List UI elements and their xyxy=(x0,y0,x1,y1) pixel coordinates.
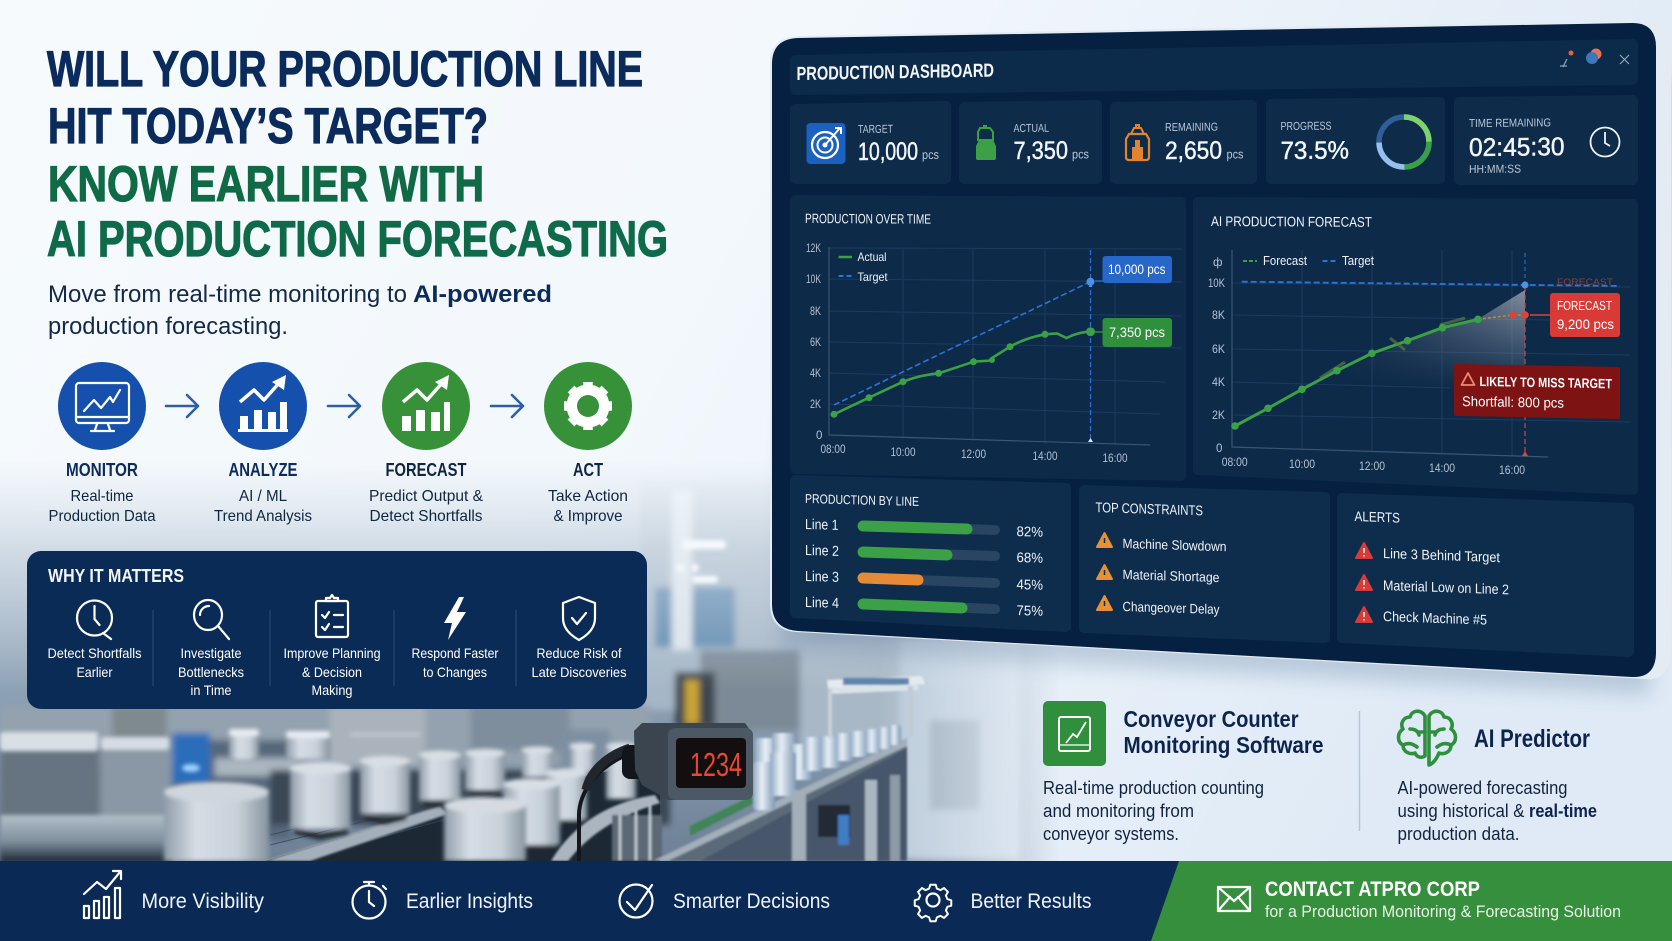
y axis labels xyxy=(806,243,822,442)
item: material shortage xyxy=(1097,565,1220,585)
y axis labels: 8K xyxy=(810,306,821,318)
panel: production by line: PRODUCTION BY LINE xyxy=(805,491,919,509)
step: forecast xyxy=(369,362,483,525)
stat card: time remaining xyxy=(1459,100,1633,180)
footer item: earlier insights xyxy=(352,882,533,918)
stat card: actual: pcs xyxy=(1072,147,1089,161)
x axis labels: 12:00 xyxy=(961,449,986,461)
factory photo background xyxy=(0,480,1048,861)
stat card: time remaining: TIME REMAINING xyxy=(1469,117,1551,130)
step: forecast: FORECAST xyxy=(386,459,467,480)
item: detect shortfalls: Detect Shortfalls xyxy=(48,645,142,661)
title xyxy=(47,41,668,267)
x axis labels: 08:00 xyxy=(820,444,846,456)
icon: brain xyxy=(1398,711,1456,765)
step: analyze: ANALYZE xyxy=(228,459,298,480)
subtitle: AI-powered xyxy=(413,281,552,308)
product: conveyor counter software xyxy=(1043,701,1324,844)
panel: alerts: ALERTS xyxy=(1354,508,1400,526)
footer item: more visibility: More Visibility xyxy=(142,890,264,913)
step: act xyxy=(544,362,632,525)
legend: Actual xyxy=(858,250,886,264)
arrow xyxy=(166,395,198,417)
counter sensor device: 1234 xyxy=(690,746,742,783)
item: detect shortfalls: Earlier xyxy=(76,664,113,680)
product: ai predictor: AI Predictor xyxy=(1474,725,1590,753)
chart panel: ai production forecast: FORECAST xyxy=(1557,277,1614,287)
item: improve planning xyxy=(284,595,380,698)
contact panel: CONTACT ATPRO CORP xyxy=(1265,877,1480,901)
right-hand conveyor xyxy=(655,741,907,861)
subtitle: Move from real-time monitoring to xyxy=(48,281,407,308)
stat card: remaining: pcs xyxy=(1226,147,1244,161)
title: AI PRODUCTION FORECASTING xyxy=(47,211,668,267)
stat card: remaining xyxy=(1115,105,1252,179)
forecast line xyxy=(1231,282,1529,430)
stat card: remaining: 2,650 xyxy=(1165,137,1222,165)
bar: line 2 xyxy=(805,543,1043,566)
x axis labels xyxy=(820,444,1128,465)
chart panel: production over time: PRODUCTION OVER TIME xyxy=(805,211,931,227)
legend: Target xyxy=(858,270,888,284)
item: reduce risk xyxy=(532,597,626,680)
y axis labels: 6K xyxy=(1212,344,1225,356)
item: improve planning: Improve Planning xyxy=(284,645,380,661)
chart panel: ai production forecast xyxy=(1198,202,1633,490)
stat card: actual: ACTUAL xyxy=(1014,123,1049,135)
stat card: actual: 7,350 xyxy=(1014,137,1068,165)
stat card: actual xyxy=(964,105,1097,179)
product: ai predictor: using historical & xyxy=(1398,801,1524,821)
title: KNOW EARLIER WITH xyxy=(48,156,484,212)
item: investigate bottlenecks: Investigate xyxy=(180,645,242,661)
footer item: earlier insights: Earlier Insights xyxy=(406,890,533,913)
y axis labels: 10K xyxy=(806,274,821,286)
item: improve planning: Making xyxy=(312,682,352,698)
counter sensor device xyxy=(579,723,753,861)
actual line xyxy=(830,327,1095,418)
icon: envelope xyxy=(1218,887,1250,911)
product: conveyor counter software: conveyor systems. xyxy=(1043,824,1179,844)
step: analyze xyxy=(214,362,312,525)
alert: line 3: Line 3 Behind Target xyxy=(1383,545,1500,565)
arrow xyxy=(328,395,360,417)
contact panel xyxy=(1151,861,1672,941)
y axis labels: 0 xyxy=(816,430,822,442)
bar: line 2: Line 2 xyxy=(805,543,839,560)
product: ai predictor xyxy=(1398,711,1597,844)
bar: line 1: 82% xyxy=(1016,523,1043,540)
y axis labels: 4K xyxy=(810,368,821,380)
bar: line 1: Line 1 xyxy=(805,517,838,534)
product: ai predictor: AI-powered forecasting xyxy=(1398,778,1568,798)
x axis labels: 12:00 xyxy=(1359,461,1385,473)
item: investigate bottlenecks xyxy=(178,600,244,698)
stat card: target: 10,000 xyxy=(858,137,918,166)
callout: likely to miss target: Shortfall: 800 pcs xyxy=(1462,393,1564,411)
callout: forecast value xyxy=(1550,293,1620,337)
forecast cone xyxy=(1378,290,1525,378)
chart panel: ai production forecast: AI PRODUCTION FORECAST xyxy=(1211,213,1372,230)
y axis labels: 8K xyxy=(1212,310,1225,322)
step: monitor: Real-time xyxy=(70,488,134,505)
item: investigate bottlenecks: in Time xyxy=(190,682,232,698)
panel: alerts xyxy=(1342,498,1629,652)
item: machine slowdown: Machine Slowdown xyxy=(1122,536,1226,554)
icon: window controls xyxy=(1560,48,1629,67)
callout: forecast value: 9,200 pcs xyxy=(1557,316,1614,332)
process flow xyxy=(48,362,632,525)
product: ai predictor: production data. xyxy=(1398,824,1520,844)
item: changeover delay: Changeover Delay xyxy=(1122,599,1220,617)
step: act: Take Action xyxy=(548,488,628,505)
step: forecast: Predict Output & xyxy=(369,488,483,505)
panel: top constraints xyxy=(1084,490,1325,638)
footer item: better results xyxy=(915,885,1092,921)
step: act: & Improve xyxy=(554,508,623,525)
bar: line 4 xyxy=(805,595,1043,619)
x axis labels: 16:00 xyxy=(1102,453,1128,465)
alert: line 3 xyxy=(1356,543,1500,565)
target line xyxy=(1242,282,1620,286)
stat card: target: TARGET xyxy=(858,124,893,136)
chart panel: production over time xyxy=(795,200,1182,476)
step: analyze: Trend Analysis xyxy=(214,508,312,525)
alert: material low: Material Low on Line 2 xyxy=(1383,577,1509,597)
item: respond faster: Respond Faster xyxy=(412,645,499,661)
callout: actual value: 7,350 pcs xyxy=(1109,324,1165,340)
item: improve planning: & Decision xyxy=(302,664,362,680)
dashboard xyxy=(770,20,1672,695)
icon: monitoring tablet xyxy=(1043,701,1106,766)
bar: line 2: 68% xyxy=(1016,549,1043,566)
bar: line 3: 45% xyxy=(1016,576,1043,593)
x axis labels xyxy=(1222,457,1525,477)
y axis labels: 2K xyxy=(810,399,821,411)
y axis labels: 4K xyxy=(1212,377,1225,389)
stat card: progress xyxy=(1271,102,1440,179)
product: conveyor counter software: Conveyor Counter xyxy=(1124,706,1298,732)
product: ai predictor: real-time xyxy=(1529,801,1597,821)
contact panel: for a Production Monitoring & Forecasting Solution xyxy=(1265,902,1621,921)
subtitle xyxy=(48,281,552,340)
progress donut xyxy=(1379,117,1429,167)
step: monitor: MONITOR xyxy=(66,459,138,480)
target line xyxy=(834,282,1090,405)
panel: why it matters xyxy=(27,551,647,709)
item: changeover delay xyxy=(1097,596,1220,617)
panel: top constraints: TOP CONSTRAINTS xyxy=(1096,499,1203,518)
footer item: better results: Better Results xyxy=(970,890,1092,913)
callout: target value: 10,000 pcs xyxy=(1108,261,1166,277)
x axis labels: 14:00 xyxy=(1032,451,1058,463)
bar: line 3 xyxy=(805,569,1043,593)
stat card: target: pcs xyxy=(922,148,939,162)
item: respond faster xyxy=(412,597,499,680)
bar: line 1 xyxy=(805,517,1043,540)
alert: check machine: Check Machine #5 xyxy=(1383,608,1487,628)
x axis labels: 16:00 xyxy=(1499,465,1525,477)
callout: likely to miss target: LIKELY TO MISS TARGET xyxy=(1480,374,1613,391)
y axis labels: 0 xyxy=(1216,443,1222,455)
panel: why it matters: WHY IT MATTERS xyxy=(48,566,184,586)
item: detect shortfalls xyxy=(48,600,142,680)
step: analyze: AI / ML xyxy=(239,488,287,505)
bar: line 4: Line 4 xyxy=(805,595,839,612)
y axis labels: 10K xyxy=(1208,278,1225,290)
item: respond faster: to Changes xyxy=(423,664,487,680)
stat card: target xyxy=(795,106,946,179)
step: monitor xyxy=(48,362,156,525)
step: act: ACT xyxy=(573,459,604,480)
x axis labels: 10:00 xyxy=(890,447,916,459)
x axis labels: 10:00 xyxy=(1289,459,1315,471)
legend: Target xyxy=(1342,254,1374,268)
title: WILL YOUR PRODUCTION LINE xyxy=(47,41,643,97)
product: conveyor counter software: Monitoring Software xyxy=(1124,732,1324,758)
dashboard header bar: PRODUCTION DASHBOARD xyxy=(796,61,994,85)
product: conveyor counter software: Real-time production counting xyxy=(1043,778,1264,798)
stat card: time remaining: HH:MM:SS xyxy=(1469,164,1521,176)
footer item: smarter decisions xyxy=(620,884,830,918)
legend xyxy=(838,250,888,284)
callout: actual value xyxy=(1095,318,1172,347)
bar: line 3: Line 3 xyxy=(805,569,839,586)
y axis labels: 12K xyxy=(806,243,821,255)
legend: Forecast xyxy=(1263,254,1307,268)
y axis labels: 2K xyxy=(1212,410,1225,422)
stat card: progress: 73.5% xyxy=(1280,136,1349,165)
title: HIT TODAY’S TARGET? xyxy=(48,98,488,154)
callout: target value xyxy=(1095,256,1172,283)
callout: forecast value: FORECAST xyxy=(1557,298,1612,313)
item: reduce risk: Late Discoveries xyxy=(532,664,626,680)
callout: likely to miss target xyxy=(1456,366,1618,417)
item: material shortage: Material Shortage xyxy=(1122,567,1220,585)
step: forecast: Detect Shortfalls xyxy=(370,508,482,525)
x axis labels: 14:00 xyxy=(1429,463,1455,475)
stat card: remaining: REMAINING xyxy=(1165,122,1218,134)
y axis labels xyxy=(1208,257,1225,455)
arrow xyxy=(491,395,523,417)
stat card: time remaining: 02:45:30 xyxy=(1469,133,1564,162)
product: conveyor counter software: and monitoring from xyxy=(1043,801,1194,821)
step: monitor: Production Data xyxy=(48,508,156,525)
dashboard header bar xyxy=(795,44,1633,90)
item: investigate bottlenecks: Bottlenecks xyxy=(178,664,244,680)
y axis labels: ф xyxy=(1213,257,1222,269)
legend xyxy=(1243,254,1374,268)
subtitle: production forecasting. xyxy=(48,313,288,340)
y axis labels: 6K xyxy=(810,337,821,349)
footer bar xyxy=(0,861,1672,941)
alert: material low xyxy=(1356,575,1509,597)
footer item: more visibility xyxy=(84,871,264,918)
x axis labels: 08:00 xyxy=(1222,457,1248,469)
item: machine slowdown xyxy=(1097,533,1226,554)
panel: production by line xyxy=(795,480,1066,627)
footer item: smarter decisions: Smarter Decisions xyxy=(673,890,830,913)
stat card: progress: PROGRESS xyxy=(1280,121,1332,133)
bar: line 4: 75% xyxy=(1016,602,1043,619)
item: reduce risk: Reduce Risk of xyxy=(536,645,622,661)
conveyor and cans photo xyxy=(0,676,925,863)
alert: check machine xyxy=(1356,607,1487,628)
